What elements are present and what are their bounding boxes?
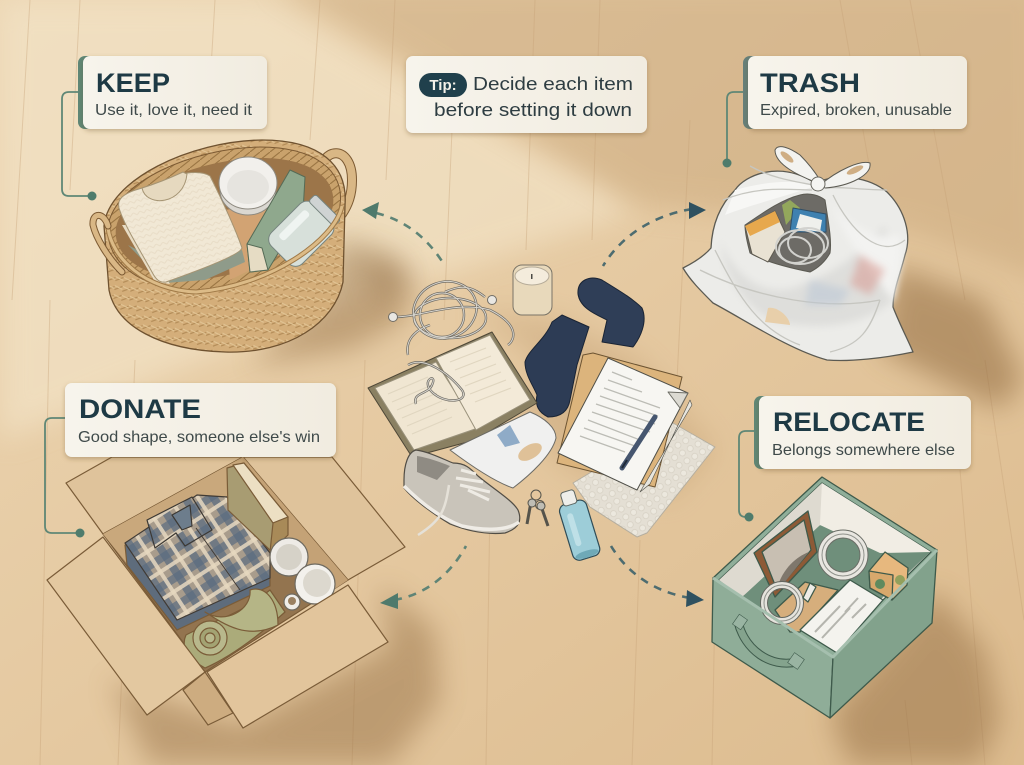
bin handle xyxy=(738,622,797,663)
centre pile of items xyxy=(368,265,715,562)
book in box xyxy=(227,463,288,550)
callout: donate xyxy=(45,383,336,538)
illustration: relocate bin xyxy=(712,477,937,718)
bag opening with contents xyxy=(745,194,831,272)
arrow: center to trash xyxy=(603,202,706,266)
paper stack xyxy=(800,580,883,653)
illustration: keep basket xyxy=(93,140,352,352)
sweater xyxy=(119,172,242,282)
callout: keep xyxy=(62,56,267,200)
relocate heading: RELOCATE xyxy=(773,407,925,437)
folded plaid shirt xyxy=(125,520,270,630)
trash description: Expired, broken, unusable xyxy=(760,102,952,119)
plastic bag xyxy=(450,412,556,488)
folders xyxy=(557,353,682,487)
donate heading: DONATE xyxy=(79,394,201,424)
object shadows xyxy=(110,235,1024,765)
tip text line 1: Decide each item xyxy=(473,74,633,94)
keep description: Use it, love it, need it xyxy=(95,102,253,119)
callout: tip xyxy=(406,56,647,133)
bubble wrap xyxy=(573,423,715,537)
green book xyxy=(247,170,305,272)
callout: relocate xyxy=(739,396,971,522)
water bottle xyxy=(554,487,602,562)
bag tie ears xyxy=(775,147,820,182)
tip text line 2: before setting it down xyxy=(434,100,632,120)
donate description: Good shape, someone else's win xyxy=(78,429,320,446)
tip badge xyxy=(419,73,467,97)
relocate description: Belongs somewhere else xyxy=(772,442,955,459)
arrow: center to keep xyxy=(362,202,445,266)
candle xyxy=(513,265,552,315)
arrow: center to donate xyxy=(380,546,466,609)
keep heading: KEEP xyxy=(96,68,170,98)
illustration: donate box xyxy=(47,457,405,728)
wooden cube xyxy=(869,552,908,600)
cable coil upper xyxy=(818,530,868,580)
open book xyxy=(368,332,537,457)
cable coil lower xyxy=(760,582,804,624)
cardboard envelope xyxy=(775,582,838,632)
arrow: center to relocate xyxy=(611,546,704,607)
socks xyxy=(578,278,644,347)
right basket handle xyxy=(319,153,352,214)
picture frame xyxy=(754,511,817,597)
callout: trash xyxy=(722,56,967,168)
document with pen xyxy=(558,358,692,492)
bowls xyxy=(220,165,276,215)
sneaker xyxy=(404,450,520,533)
tip badge: Tip: xyxy=(429,77,457,94)
mugs xyxy=(270,538,308,576)
illustration: trash bag xyxy=(683,147,913,361)
glass jar xyxy=(265,191,344,270)
canvas tote xyxy=(184,590,285,668)
trash heading: TRASH xyxy=(760,68,860,98)
keys xyxy=(527,490,548,526)
left basket handle xyxy=(93,215,122,272)
earphone cable xyxy=(392,273,513,404)
